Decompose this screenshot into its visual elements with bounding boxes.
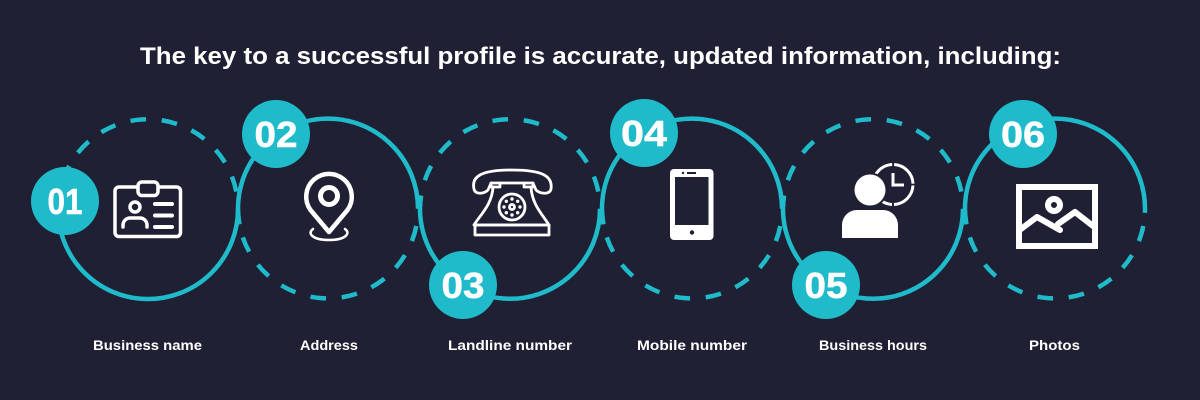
ring 02 solid arc: [238, 119, 418, 224]
label: landline number: Landline number: [448, 338, 573, 353]
ring 03 dashed arc: [420, 119, 598, 206]
icon: rotary telephone: [474, 170, 551, 235]
ring 03 solid arc: [420, 196, 600, 299]
step 05: business hours: [783, 119, 963, 353]
ring 05 dashed arc: [783, 119, 961, 206]
badge 02: [242, 100, 310, 168]
badge 06: 06: [1001, 114, 1045, 155]
icon: person with clock: [842, 164, 913, 238]
title: The key to a successful profile is accurate, updated information, including:: [140, 43, 1061, 70]
icon: id badge: [115, 182, 180, 236]
badge 05: [792, 251, 860, 319]
ring 01 dashed arc: [58, 119, 236, 206]
step 06: photos: [965, 100, 1145, 353]
icon: map pin: [306, 174, 352, 240]
ring 06 solid arc: [965, 119, 1145, 224]
step 04: mobile number: [602, 99, 782, 353]
step 02: address: [238, 100, 418, 353]
label: business hours: Business hours: [819, 338, 927, 353]
label: business name: Business name: [93, 338, 203, 353]
ring 04 solid arc: [602, 119, 782, 224]
badge 03: [429, 251, 497, 319]
icon: photo: [1019, 187, 1095, 246]
badge 03: 03: [442, 265, 484, 306]
badge 01: [31, 167, 99, 235]
label: address: Address: [300, 338, 358, 353]
badge 05: 05: [804, 265, 848, 306]
ring 05 solid arc: [783, 196, 963, 299]
badge 06: [989, 100, 1057, 168]
icon: mobile phone: [670, 169, 714, 240]
badge 04: [610, 99, 678, 167]
ring 01 solid arc: [58, 205, 238, 299]
badge 02: 02: [254, 114, 298, 155]
badge 01: 01: [48, 181, 82, 222]
step 03: landline number: [420, 119, 600, 353]
ring 04 dashed arc: [602, 212, 780, 298]
ring 06 dashed arc: [965, 212, 1143, 298]
label: mobile number: Mobile number: [637, 338, 748, 353]
step 01: business name: [31, 119, 238, 353]
badge 04: 04: [621, 113, 667, 154]
ring 02 dashed arc: [238, 212, 416, 298]
label: photos: Photos: [1029, 338, 1080, 353]
